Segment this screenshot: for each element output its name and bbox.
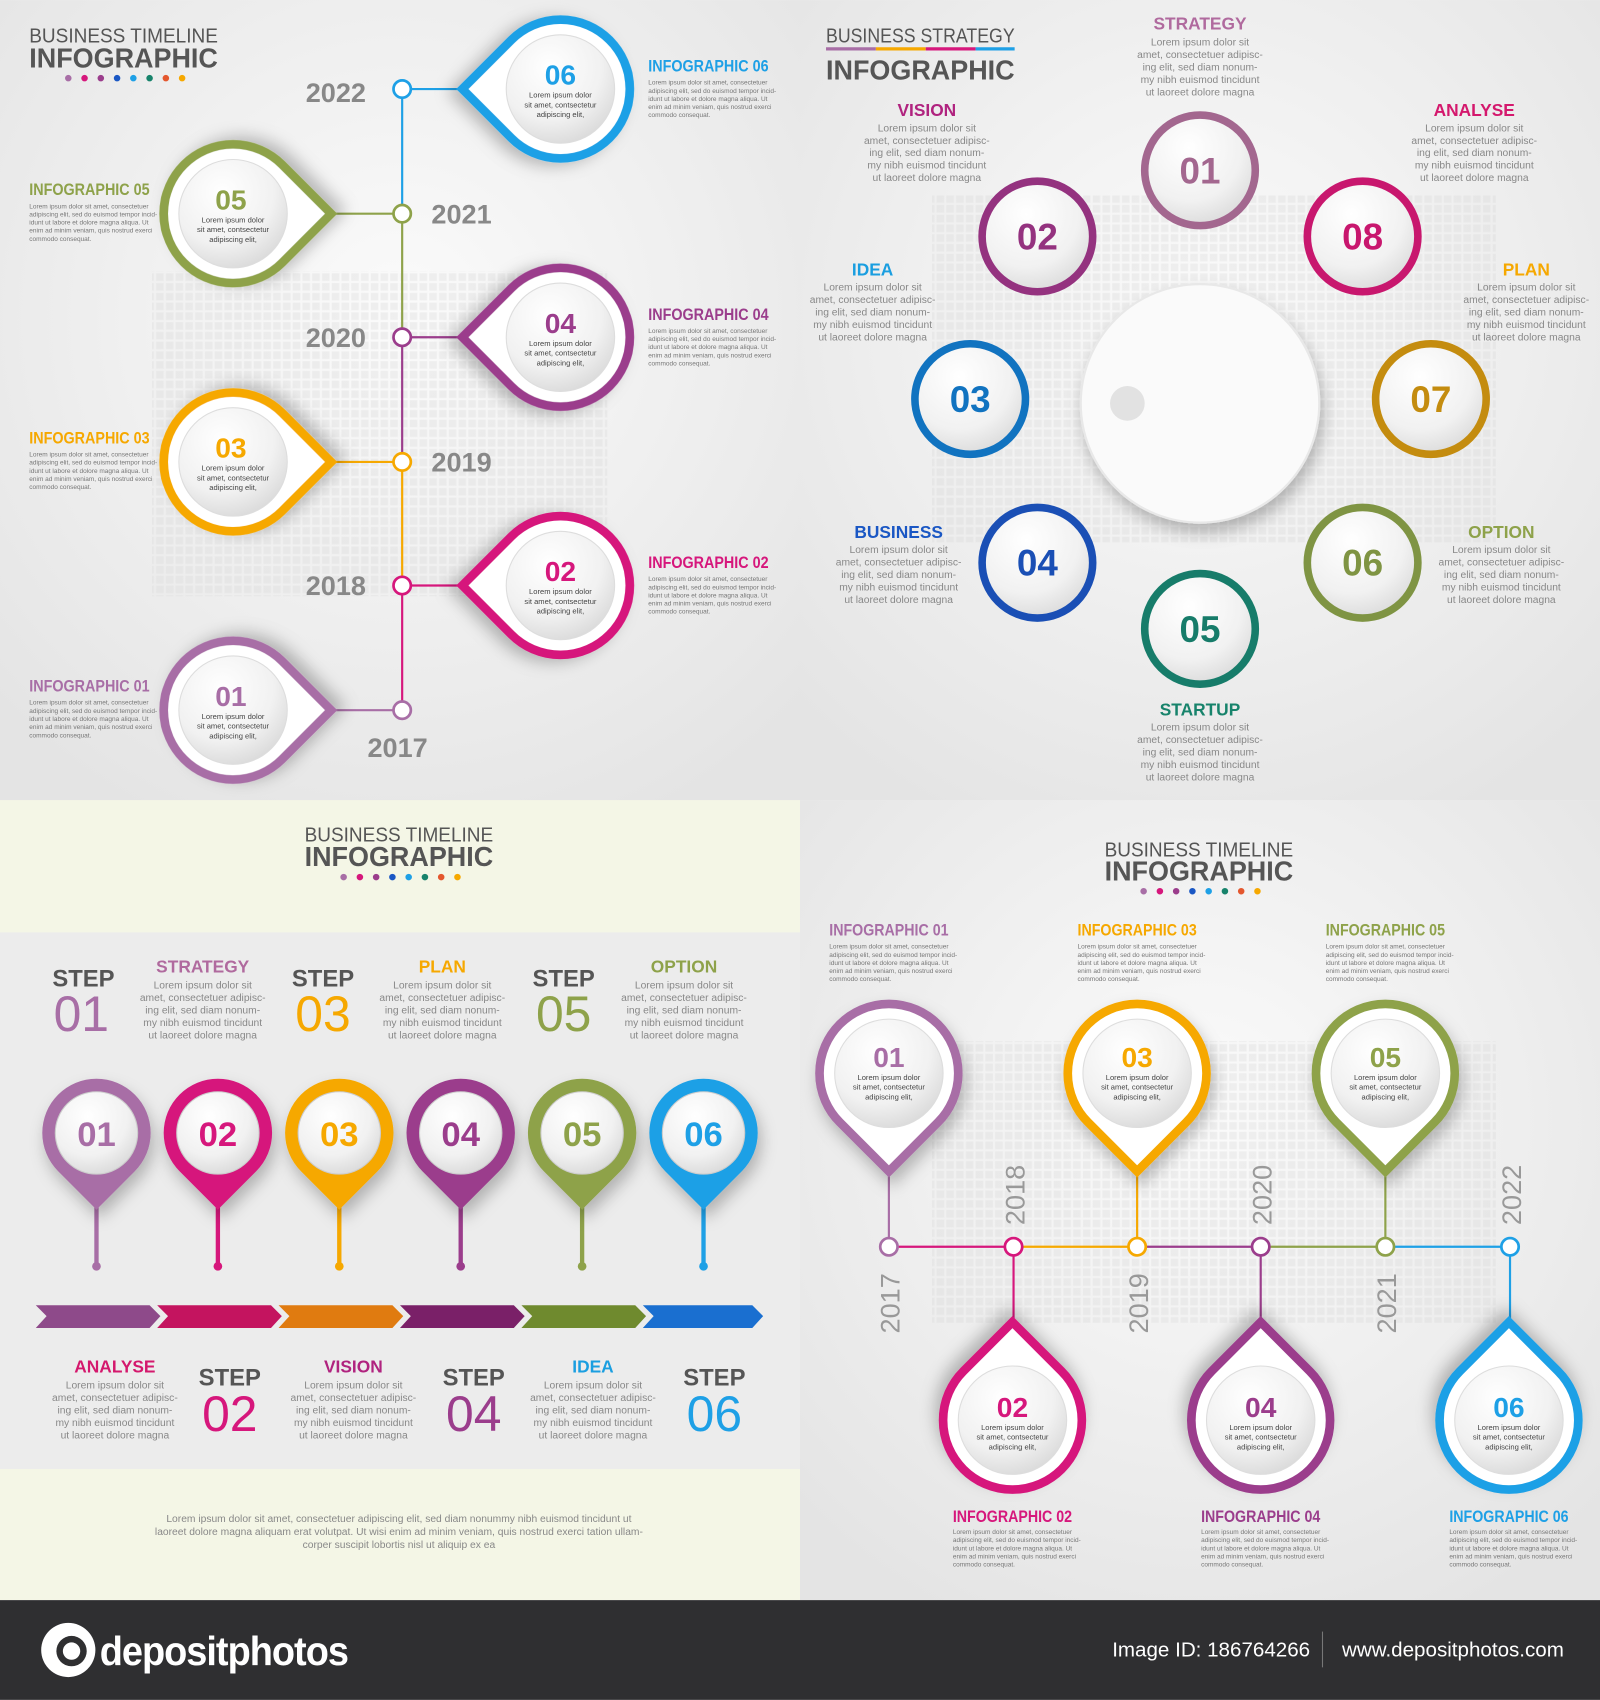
- footer bar: depositphotos: [100, 1628, 348, 1674]
- step labels top: amet, consectetuer adipisc-: [140, 993, 266, 1004]
- step labels top: Lorem ipsum dolor sit: [154, 981, 252, 992]
- panel: top-left timeline: enim ad minim veniam, quis nostrud exerci: [648, 352, 771, 359]
- title: BUSINESS TIMELINE: [305, 823, 493, 846]
- pins: 01: [77, 1116, 116, 1154]
- step labels top: STRATEGY: [156, 956, 250, 976]
- labels: STRATEGY: [1153, 13, 1247, 33]
- years rotated: 2018: [999, 1165, 1030, 1225]
- panel: top-left timeline: commodo consequat.: [648, 609, 711, 616]
- step labels bottom: ANALYSE: [74, 1356, 156, 1376]
- timeline line: [331, 89, 466, 710]
- step labels top: [52, 956, 747, 1042]
- labels: [852, 13, 1550, 720]
- panel: bottom-right horizontal timeline: Lorem ipsum dolor sit amet, consectetuer: [1326, 944, 1445, 951]
- panel: top-right strategy circle: ut laoreet dolore magna: [1472, 333, 1581, 344]
- panel: bottom-right horizontal timeline: idunt ut labore et dolore magna aliqua. Ut: [953, 1545, 1072, 1552]
- panel: top-right strategy circle: my nibh euismod tincidunt: [839, 582, 958, 593]
- years: 2019: [431, 447, 492, 478]
- title: INFOGRAPHIC: [1105, 854, 1293, 886]
- step labels top: 05: [536, 986, 591, 1042]
- step labels bottom: 04: [446, 1386, 501, 1442]
- panel: top-right strategy circle: Lorem ipsum dolor sit: [1452, 545, 1550, 556]
- pins: sit amet, contsectetur: [1473, 1433, 1545, 1442]
- panel: top-right strategy circle: 05: [1180, 609, 1220, 650]
- title: INFOGRAPHIC: [29, 41, 218, 73]
- headings: INFOGRAPHIC 02: [953, 1508, 1072, 1526]
- panel: bottom-right horizontal timeline: adipiscing elit, sed do euismod tempor incid-: [1078, 952, 1205, 959]
- title: BUSINESS TIMELINE: [29, 24, 218, 47]
- drops: sit amet, contsectetur: [197, 473, 270, 482]
- step labels top: my nibh euismod tincidunt: [143, 1018, 262, 1029]
- side labels: INFOGRAPHIC 05: [29, 181, 150, 199]
- panel: top-left timeline: Lorem ipsum dolor sit amet, consectetuer: [29, 700, 148, 707]
- step labels top: ut laoreet dolore magna: [388, 1031, 497, 1042]
- panel: top-right strategy circle: amet, consectetuer adipisc-: [1463, 295, 1589, 306]
- panel: top-right strategy circle: ut laoreet dolore magna: [1420, 173, 1529, 184]
- panel: bottom-right horizontal timeline: idunt ut labore et dolore magna aliqua. Ut: [1326, 960, 1445, 967]
- step labels bottom: amet, consectetuer adipisc-: [52, 1393, 178, 1404]
- panel: top-left timeline: idunt ut labore et dolore magna aliqua. Ut: [648, 592, 768, 599]
- drops: sit amet, contsectetur: [197, 225, 270, 234]
- panel: top-right strategy circle: 04: [1017, 543, 1058, 584]
- step labels bottom: ut laoreet dolore magna: [539, 1431, 648, 1442]
- panel: top-right strategy circle: my nibh euismod tincidunt: [1141, 760, 1260, 771]
- panel: top-right strategy circle: 08: [1342, 216, 1383, 257]
- panel: top-left timeline: commodo consequat.: [29, 732, 92, 739]
- pins: 06: [684, 1116, 723, 1154]
- footer bar: [0, 1600, 1600, 1700]
- drops: [164, 20, 630, 780]
- step labels bottom: amet, consectetuer adipisc-: [530, 1393, 656, 1404]
- panel: top-right strategy circle: Lorem ipsum dolor sit: [878, 123, 976, 134]
- step labels bottom: VISION: [324, 1356, 383, 1376]
- title: [29, 24, 218, 81]
- panel: top-right strategy circle: Lorem ipsum dolor sit: [850, 545, 948, 556]
- drops: 06: [545, 59, 576, 91]
- icon: camera logo: [41, 1623, 95, 1677]
- step labels top: ut laoreet dolore magna: [630, 1031, 739, 1042]
- title: [1105, 839, 1293, 894]
- pins: sit amet, contsectetur: [1101, 1083, 1174, 1092]
- panel: top-left timeline: idunt ut labore et dolore magna aliqua. Ut: [648, 344, 768, 351]
- headings: INFOGRAPHIC 03: [1078, 922, 1197, 940]
- drops: 03: [215, 432, 247, 464]
- panel: bottom-right horizontal timeline: commodo consequat.: [1449, 1562, 1512, 1569]
- drops: sit amet, contsectetur: [524, 100, 597, 109]
- labels: PLAN: [1503, 259, 1550, 279]
- drops: adipiscing elit,: [209, 235, 257, 244]
- panel: top-right strategy circle: ut laoreet dolore magna: [844, 595, 953, 606]
- panel: top-right strategy circle: ut laoreet dolore magna: [1146, 88, 1255, 99]
- panel: top-right strategy circle: my nibh euismod tincidunt: [1415, 161, 1534, 172]
- headings: INFOGRAPHIC 01: [829, 922, 949, 940]
- panel: top-left timeline: Lorem ipsum dolor sit amet, consectetuer: [648, 80, 767, 87]
- step labels bottom: STEP: [199, 1365, 261, 1392]
- title: BUSINESS STRATEGY: [826, 24, 1015, 47]
- years rotated: 2020: [1247, 1165, 1278, 1225]
- pins: 03: [320, 1116, 359, 1154]
- drops: adipiscing elit,: [537, 110, 584, 119]
- panel: top-right strategy circle: Lorem ipsum dolor sit: [823, 283, 922, 294]
- step labels top: amet, consectetuer adipisc-: [621, 993, 747, 1004]
- panel: top-right strategy circle: my nibh euismod tincidunt: [1141, 75, 1260, 86]
- panel: top-right strategy circle: ut laoreet dolore magna: [818, 333, 927, 344]
- step labels top: STEP: [292, 966, 354, 993]
- pins: adipiscing elit,: [1485, 1442, 1533, 1451]
- years rotated: 2021: [1371, 1273, 1402, 1333]
- title: BUSINESS TIMELINE: [1105, 839, 1293, 862]
- step labels bottom: ing elit, sed diam nonum-: [296, 1406, 411, 1417]
- arrow band: [36, 1305, 763, 1328]
- step labels top: Lorem ipsum dolor sit: [635, 981, 733, 992]
- panel: top-right strategy circle: ing elit, sed diam nonum-: [1417, 148, 1532, 159]
- panel: bottom-right horizontal timeline: idunt ut labore et dolore magna aliqua. Ut: [1449, 1545, 1569, 1552]
- panel: top-left timeline: idunt ut labore et dolore magna aliqua. Ut: [648, 96, 768, 103]
- side labels: INFOGRAPHIC 02: [648, 554, 769, 572]
- pins: 04: [441, 1116, 481, 1154]
- step labels top: ut laoreet dolore magna: [148, 1031, 257, 1042]
- pins: 02: [997, 1391, 1028, 1423]
- step labels bottom: Lorem ipsum dolor sit: [66, 1381, 164, 1392]
- side labels: INFOGRAPHIC 01: [29, 678, 150, 696]
- pins: Lorem ipsum dolor: [1354, 1073, 1417, 1082]
- step labels bottom: Lorem ipsum dolor sit: [304, 1381, 403, 1392]
- years: 2018: [306, 570, 366, 601]
- panel: bottom-right horizontal timeline: enim ad minim veniam, quis nostrud exerci: [1326, 968, 1449, 975]
- panel: bottom-right horizontal timeline: enim ad minim veniam, quis nostrud exerci: [953, 1553, 1076, 1560]
- panel: bottom-right horizontal timeline: adipiscing elit, sed do euismod tempor incid-: [1326, 952, 1454, 959]
- pins: [42, 1079, 758, 1271]
- step labels bottom: IDEA: [572, 1356, 614, 1376]
- pins: adipiscing elit,: [1113, 1092, 1161, 1101]
- step labels top: STEP: [52, 966, 115, 993]
- panel: top-left timeline: idunt ut labore et dolore magna aliqua. Ut: [29, 716, 149, 723]
- step labels top: ing elit, sed diam nonum-: [145, 1006, 260, 1017]
- panel: bottom-right horizontal timeline: idunt ut labore et dolore magna aliqua. Ut: [1201, 1545, 1321, 1552]
- labels: IDEA: [852, 259, 894, 279]
- years: [306, 77, 492, 763]
- panel: bottom-right horizontal timeline: [820, 839, 1578, 1569]
- panel: top-right strategy circle: ing elit, sed diam nonum-: [1444, 570, 1559, 581]
- step labels bottom: amet, consectetuer adipisc-: [291, 1393, 416, 1404]
- panel: top-left timeline: commodo consequat.: [648, 360, 711, 367]
- step labels top: my nibh euismod tincidunt: [625, 1018, 744, 1029]
- years: 2021: [431, 198, 492, 229]
- panel: top-left timeline: commodo consequat.: [648, 112, 711, 119]
- drops: Lorem ipsum dolor: [202, 215, 264, 224]
- drops: Lorem ipsum dolor: [202, 712, 264, 721]
- pins: sit amet, contsectetur: [1225, 1433, 1297, 1442]
- panel: top-left timeline: [29, 20, 776, 780]
- panel: top-left timeline: commodo consequat.: [29, 236, 92, 243]
- headings: INFOGRAPHIC 05: [1326, 922, 1445, 940]
- panel: top-right strategy circle: Lorem ipsum dolor sit: [1151, 38, 1249, 49]
- step labels top: ing elit, sed diam nonum-: [627, 1006, 741, 1017]
- pins: 01: [873, 1041, 905, 1073]
- title: [305, 823, 493, 880]
- pins: 02: [199, 1116, 237, 1154]
- pins: 03: [1121, 1041, 1153, 1073]
- step labels top: STEP: [533, 966, 595, 993]
- panel: top-right strategy circle: my nibh euismod tincidunt: [1442, 582, 1561, 593]
- footer paragraph: corper suscipit lobortis nisl ut aliquip ex ea: [303, 1540, 495, 1551]
- panel: bottom-right horizontal timeline: commodo consequat.: [1201, 1562, 1263, 1569]
- pins: Lorem ipsum dolor: [981, 1423, 1044, 1432]
- labels: STARTUP: [1160, 700, 1240, 720]
- years rotated: [875, 1165, 1527, 1333]
- labels: VISION: [897, 100, 956, 120]
- panel: top-left timeline: adipiscing elit, sed do euismod tempor incid-: [648, 88, 776, 95]
- side labels: [29, 58, 769, 696]
- pins: adipiscing elit,: [1237, 1442, 1285, 1451]
- panel: top-left timeline: commodo consequat.: [29, 484, 92, 491]
- step labels bottom: ut laoreet dolore magna: [299, 1431, 408, 1442]
- step labels top: 03: [295, 986, 351, 1042]
- panel: bottom-right horizontal timeline: idunt ut labore et dolore magna aliqua. Ut: [1078, 960, 1197, 967]
- panel: bottom-right horizontal timeline: commodo consequat.: [953, 1562, 1015, 1569]
- panel: top-right strategy circle: ing elit, sed diam nonum-: [1143, 748, 1257, 759]
- step labels bottom: ing elit, sed diam nonum-: [57, 1406, 172, 1417]
- panel: bottom-right horizontal timeline: Lorem ipsum dolor sit amet, consectetuer: [953, 1529, 1072, 1536]
- center circle: [1081, 284, 1319, 523]
- panel: bottom-left steps: [36, 823, 763, 1551]
- step labels top: 01: [54, 986, 109, 1042]
- panel: top-right strategy circle: amet, consectetuer adipisc-: [1137, 50, 1263, 61]
- panel: top-right strategy circle: 07: [1410, 379, 1451, 420]
- step labels bottom: 06: [687, 1386, 742, 1442]
- panel: top-left timeline: adipiscing elit, sed do euismod tempor incid-: [648, 336, 776, 343]
- panel: bottom-right horizontal timeline: Lorem ipsum dolor sit amet, consectetuer: [1078, 944, 1197, 951]
- panel: top-left timeline: enim ad minim veniam, quis nostrud exerci: [29, 476, 152, 483]
- drops: 05: [215, 183, 247, 215]
- panel: top-right strategy circle: ut laoreet dolore magna: [1146, 773, 1255, 784]
- step labels bottom: Lorem ipsum dolor sit: [544, 1381, 642, 1392]
- panel: top-left timeline: adipiscing elit, sed do euismod tempor incid-: [29, 460, 157, 467]
- drops: adipiscing elit,: [537, 607, 584, 616]
- panel: top-left timeline: Lorem ipsum dolor sit amet, consectetuer: [29, 452, 148, 459]
- pins: Lorem ipsum dolor: [1106, 1073, 1169, 1082]
- panel: bottom-right horizontal timeline: enim ad minim veniam, quis nostrud exerci: [1449, 1553, 1573, 1560]
- panel: top-left timeline: idunt ut labore et dolore magna aliqua. Ut: [29, 468, 149, 475]
- panel: bottom-right horizontal timeline: idunt ut labore et dolore magna aliqua. Ut: [829, 960, 949, 967]
- step labels bottom: my nibh euismod tincidunt: [55, 1418, 174, 1429]
- pins: [820, 1004, 1578, 1490]
- rings: [915, 115, 1486, 684]
- step labels bottom: ut laoreet dolore magna: [61, 1431, 169, 1442]
- pins: adipiscing elit,: [865, 1092, 913, 1101]
- step labels bottom: 02: [202, 1386, 258, 1442]
- labels: OPTION: [1468, 522, 1535, 542]
- panel: top-right strategy circle: Lorem ipsum dolor sit: [1477, 283, 1575, 294]
- panel: top-right strategy circle: Lorem ipsum dolor sit: [1425, 123, 1523, 134]
- drops: 01: [215, 680, 247, 712]
- pins: sit amet, contsectetur: [1349, 1083, 1422, 1092]
- footer bar: www.depositphotos.com: [1341, 1639, 1564, 1662]
- panel: bottom-right horizontal timeline: enim ad minim veniam, quis nostrud exerci: [1078, 968, 1201, 975]
- drops: 04: [545, 307, 576, 339]
- headings: INFOGRAPHIC 06: [1449, 1508, 1569, 1526]
- pins: 05: [1370, 1041, 1401, 1073]
- panel: top-left timeline: Lorem ipsum dolor sit amet, consectetuer: [648, 576, 767, 583]
- step labels bottom: my nibh euismod tincidunt: [294, 1418, 413, 1429]
- panel: top-right strategy circle: amet, consectetuer adipisc-: [1137, 735, 1263, 746]
- pins: 05: [563, 1116, 601, 1154]
- drops: adipiscing elit,: [209, 483, 257, 492]
- years rotated: 2017: [875, 1273, 906, 1333]
- panel: bottom-right horizontal timeline: Lorem ipsum dolor sit amet, consectetuer: [1449, 1529, 1569, 1536]
- step labels top: ing elit, sed diam nonum-: [385, 1006, 500, 1017]
- panel: top-left timeline: idunt ut labore et dolore magna aliqua. Ut: [29, 220, 149, 227]
- panel: bottom-right horizontal timeline: adipiscing elit, sed do euismod tempor incid-: [829, 952, 957, 959]
- panel: top-left timeline: Lorem ipsum dolor sit amet, consectetuer: [648, 328, 767, 335]
- years rotated: 2022: [1496, 1165, 1527, 1225]
- panel: top-right strategy circle: amet, consectetuer adipisc-: [1438, 557, 1564, 568]
- panel: top-right strategy circle: amet, consectetuer adipisc-: [1411, 136, 1537, 147]
- panel: top-right strategy circle: 01: [1180, 150, 1220, 191]
- labels: BUSINESS: [854, 522, 943, 542]
- pins: adipiscing elit,: [1362, 1092, 1409, 1101]
- step labels bottom: [52, 1356, 746, 1442]
- pins: 06: [1493, 1391, 1525, 1423]
- timeline lines: [889, 1171, 1510, 1325]
- panel: top-right strategy circle: ing elit, sed diam nonum-: [869, 148, 984, 159]
- side labels: INFOGRAPHIC 03: [29, 429, 150, 447]
- panel: top-left timeline: adipiscing elit, sed do euismod tempor incid-: [648, 584, 776, 591]
- drops: 02: [545, 555, 576, 587]
- step labels bottom: STEP: [683, 1365, 746, 1392]
- years: 2017: [367, 732, 428, 763]
- title: [826, 24, 1015, 85]
- panel: top-right strategy circle: ing elit, sed diam nonum-: [1143, 63, 1257, 74]
- panel: bottom-right horizontal timeline: adipiscing elit, sed do euismod tempor incid-: [953, 1537, 1081, 1544]
- side labels: INFOGRAPHIC 06: [648, 58, 769, 76]
- drops: Lorem ipsum dolor: [529, 91, 592, 100]
- panel: top-right strategy circle: 02: [1017, 216, 1058, 257]
- drops: adipiscing elit,: [537, 358, 584, 367]
- panel: top-right strategy circle: amet, consectetuer adipisc-: [810, 295, 935, 306]
- step labels top: OPTION: [651, 956, 717, 976]
- drops: adipiscing elit,: [209, 731, 257, 740]
- panel: bottom-right horizontal timeline: enim ad minim veniam, quis nostrud exerci: [829, 968, 952, 975]
- panel: top-right strategy circle: amet, consectetuer adipisc-: [864, 136, 990, 147]
- footer bar: Image ID: 186764266: [1112, 1639, 1310, 1662]
- drops: sit amet, contsectetur: [524, 349, 597, 358]
- step labels bottom: my nibh euismod tincidunt: [534, 1418, 653, 1429]
- panel: top-right strategy circle: ut laoreet dolore magna: [873, 173, 981, 184]
- drops: sit amet, contsectetur: [197, 722, 270, 731]
- title: INFOGRAPHIC: [305, 840, 493, 872]
- panel: bottom-right horizontal timeline: commodo consequat.: [829, 976, 892, 983]
- panel: top-right strategy circle: 06: [1342, 543, 1383, 584]
- labels: ANALYSE: [1434, 100, 1515, 120]
- side labels: INFOGRAPHIC 04: [648, 306, 769, 324]
- years rotated: 2019: [1123, 1273, 1154, 1333]
- title: INFOGRAPHIC: [826, 53, 1015, 85]
- step labels top: my nibh euismod tincidunt: [383, 1018, 502, 1029]
- pins: adipiscing elit,: [989, 1442, 1036, 1451]
- panel: top-right strategy circle: Lorem ipsum dolor sit: [1151, 723, 1249, 734]
- years: 2020: [306, 322, 366, 353]
- years: 2022: [306, 77, 366, 108]
- pins: Lorem ipsum dolor: [1478, 1423, 1540, 1432]
- panel: bottom-right horizontal timeline: commodo consequat.: [1326, 976, 1388, 983]
- headings: [829, 922, 1569, 1526]
- panel: top-left timeline: adipiscing elit, sed do euismod tempor incid-: [29, 708, 157, 715]
- drops: Lorem ipsum dolor: [202, 464, 264, 473]
- step labels bottom: ing elit, sed diam nonum-: [536, 1406, 650, 1417]
- panel: top-left timeline: enim ad minim veniam, quis nostrud exerci: [29, 228, 152, 235]
- panel: top-left timeline: enim ad minim veniam, quis nostrud exerci: [648, 601, 771, 608]
- panel: top-left timeline: Lorem ipsum dolor sit amet, consectetuer: [29, 203, 148, 210]
- panel: top-right strategy circle: 03: [950, 379, 991, 420]
- panel: top-right strategy circle: amet, consectetuer adipisc-: [836, 557, 962, 568]
- pins: sit amet, contsectetur: [853, 1083, 925, 1092]
- panel: bottom-right horizontal timeline: enim ad minim veniam, quis nostrud exerci: [1201, 1553, 1324, 1560]
- drops: sit amet, contsectetur: [524, 597, 597, 606]
- panel: top-left timeline: adipiscing elit, sed do euismod tempor incid-: [29, 211, 157, 218]
- headings: INFOGRAPHIC 04: [1201, 1508, 1320, 1526]
- panel: top-right strategy circle: my nibh euismod tincidunt: [813, 320, 932, 331]
- panel: bottom-right horizontal timeline: commodo consequat.: [1078, 976, 1140, 983]
- pins: Lorem ipsum dolor: [858, 1073, 920, 1082]
- panel: top-right strategy circle: my nibh euismod tincidunt: [867, 161, 986, 172]
- panel: bottom-right horizontal timeline: Lorem ipsum dolor sit amet, consectetuer: [1201, 1529, 1320, 1536]
- step labels top: amet, consectetuer adipisc-: [379, 993, 505, 1004]
- pins: sit amet, contsectetur: [976, 1433, 1049, 1442]
- panel: top-left timeline: enim ad minim veniam, quis nostrud exerci: [29, 724, 152, 731]
- footer paragraph: Lorem ipsum dolor sit amet, consectetuer adipiscing elit, sed diam nonummy nibh euismod tincidunt ut: [166, 1514, 632, 1525]
- drops: Lorem ipsum dolor: [529, 339, 592, 348]
- footer paragraph: [155, 1514, 643, 1551]
- footer paragraph: laoreet dolore magna aliquam erat volutpat. Ut wisi enim ad minim veniam, quis nostrud exerci tation ullam-: [155, 1527, 643, 1538]
- pins: 04: [1245, 1391, 1277, 1423]
- panel: top-right strategy circle: ing elit, sed diam nonum-: [1469, 308, 1584, 319]
- panel: bottom-right horizontal timeline: Lorem ipsum dolor sit amet, consectetuer: [829, 944, 948, 951]
- panel: bottom-right horizontal timeline: adipiscing elit, sed do euismod tempor incid-: [1201, 1537, 1329, 1544]
- panel: top-right strategy circle: ut laoreet dolore magna: [1447, 595, 1556, 606]
- step labels top: Lorem ipsum dolor sit: [393, 981, 491, 992]
- panel: top-right strategy circle: my nibh euismod tincidunt: [1467, 320, 1586, 331]
- step labels top: PLAN: [419, 956, 466, 976]
- year nodes: [393, 80, 411, 719]
- pins: Lorem ipsum dolor: [1229, 1423, 1292, 1432]
- panel: top-right strategy circle: [810, 13, 1589, 784]
- panel: top-left timeline: enim ad minim veniam, quis nostrud exerci: [648, 104, 771, 111]
- drops: Lorem ipsum dolor: [529, 587, 592, 596]
- panel: top-right strategy circle: ing elit, sed diam nonum-: [841, 570, 956, 581]
- panel: bottom-right horizontal timeline: adipiscing elit, sed do euismod tempor incid-: [1449, 1537, 1577, 1544]
- panel: top-right strategy circle: ing elit, sed diam nonum-: [815, 308, 930, 319]
- step labels bottom: STEP: [443, 1365, 505, 1392]
